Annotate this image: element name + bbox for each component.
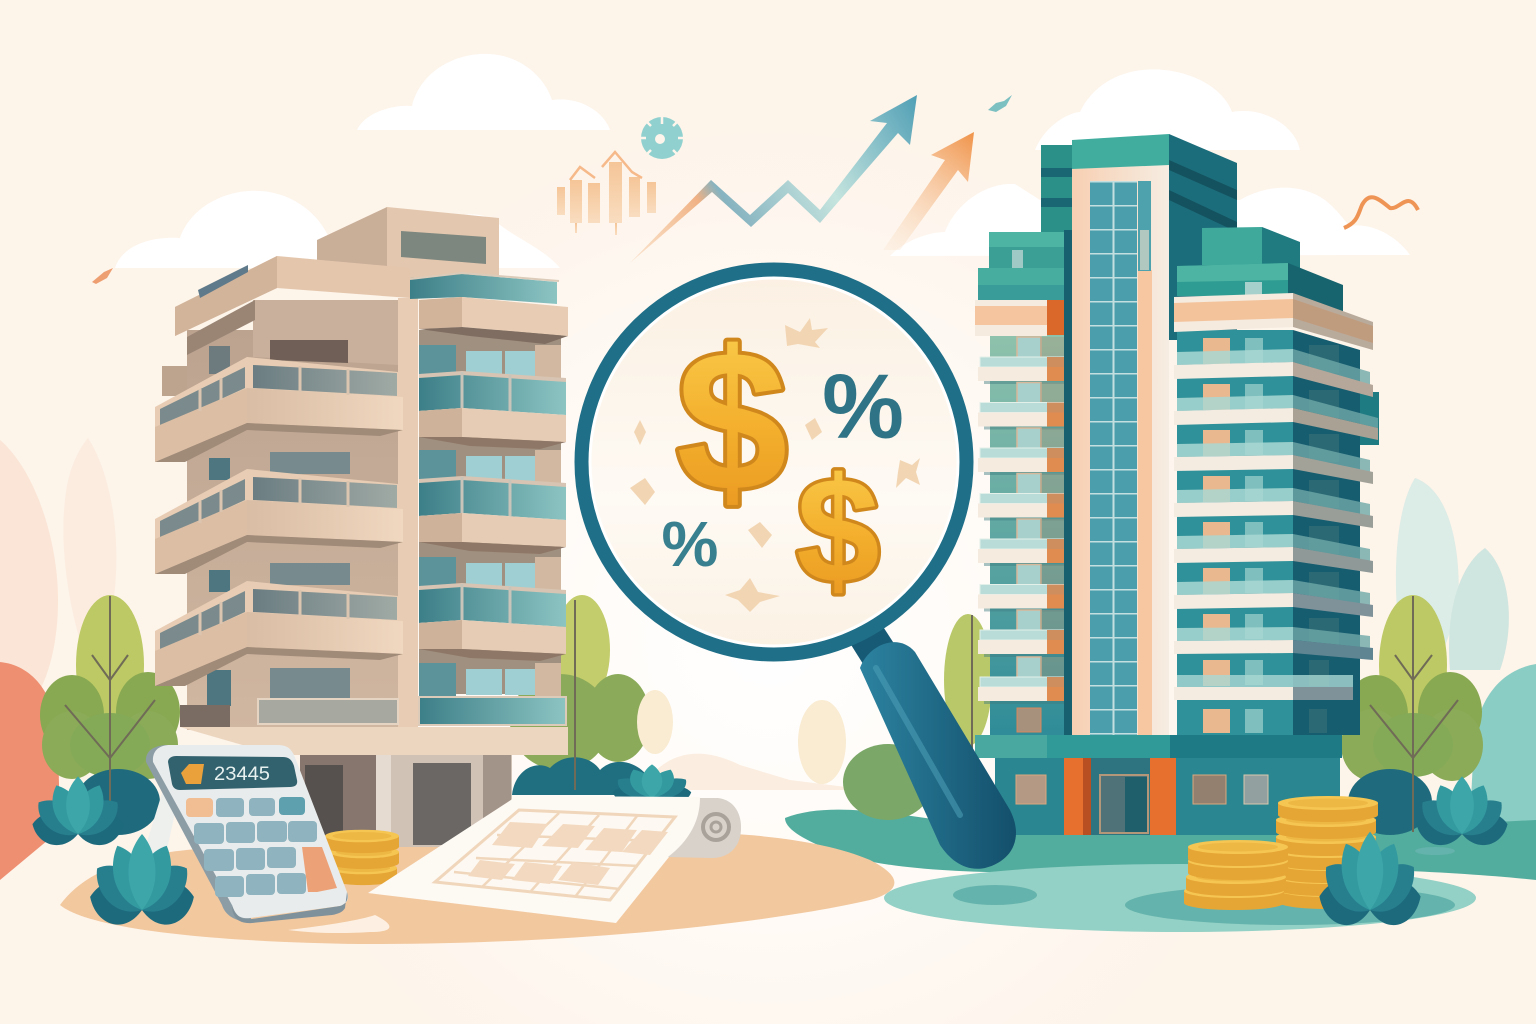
- pale hills in the distance: [640, 754, 870, 790]
- cloud: top centre: [357, 54, 610, 130]
- ground floor: [995, 758, 1340, 835]
- arrow: orange: [883, 132, 974, 250]
- left windows: [207, 452, 350, 706]
- left wing floors: [978, 332, 1064, 732]
- screen: [168, 756, 297, 790]
- lens rim highlight: [590, 278, 958, 646]
- left wing upper storeys: [978, 232, 1064, 300]
- ground: teal right: [785, 810, 1536, 880]
- icon: large dollar sign: $: [676, 310, 788, 533]
- keys: [186, 797, 337, 897]
- icon: large percent sign: %: [822, 356, 904, 458]
- ground floor canopy: [180, 727, 568, 755]
- top right glass balcony: [410, 273, 568, 344]
- central pillar: [398, 298, 418, 730]
- pool shadows: [953, 847, 1455, 925]
- roof slab: [175, 256, 410, 336]
- screen icon: [181, 764, 204, 784]
- hill: teal right: [1470, 664, 1536, 860]
- handle: [848, 622, 1016, 869]
- hill: salmon left: [0, 662, 60, 880]
- coins: front stack: [1184, 840, 1288, 910]
- decoration: right squiggle: [1344, 197, 1418, 228]
- stand: [142, 790, 178, 858]
- icon: small dollar sign: $: [796, 446, 880, 614]
- right side floors: [419, 330, 561, 696]
- dark recess under roof: [253, 300, 398, 365]
- dark column: [1064, 230, 1072, 735]
- right wing floors: [1174, 293, 1378, 733]
- right wing upper storeys: [1177, 227, 1343, 320]
- bottom edge: [232, 892, 348, 923]
- right balconies: [419, 371, 566, 661]
- cloud: behind left building: [115, 191, 560, 268]
- back tower: [1041, 134, 1237, 340]
- canopy: [975, 735, 1342, 758]
- ground: light teal pool: [884, 864, 1476, 932]
- right wing walls: [1177, 330, 1379, 735]
- sand highlight: [288, 915, 389, 933]
- tree: right foreground: [1341, 595, 1483, 835]
- foliage: pale leaves far right: [1396, 478, 1509, 670]
- icon: bar chart: [557, 152, 656, 235]
- bush: calculator foreground: [86, 834, 198, 932]
- bush: left foreground: [28, 776, 128, 851]
- central tower front: [1072, 134, 1169, 735]
- body shadow side: [146, 745, 252, 922]
- cloud: behind right building: [890, 184, 1410, 256]
- icon: gear: [640, 116, 684, 159]
- bush: teal behind scroll: [609, 764, 695, 808]
- tree: behind left building: [510, 595, 673, 795]
- tree: behind magnifier handle: [798, 614, 992, 820]
- building: left tan apartment block: [155, 207, 568, 847]
- coins: left stack behind calculator: [325, 830, 399, 885]
- chart: rising arrows: [557, 95, 974, 263]
- decoration: left bird: [92, 268, 113, 284]
- body: [153, 745, 348, 918]
- lens: [582, 270, 966, 654]
- tree: left foreground: [40, 595, 180, 835]
- balconies: left side: [155, 357, 403, 686]
- building: right teal tower: [975, 134, 1379, 835]
- screen digits: 23445: [214, 764, 270, 785]
- lens scattered marks: [630, 318, 920, 612]
- arrow: teal zigzag: [630, 95, 917, 263]
- ground: sand left: [60, 833, 894, 944]
- magnifying glass: [582, 270, 1016, 869]
- blueprint scroll: [368, 796, 741, 923]
- penthouse: [317, 207, 499, 280]
- orange top band: [1174, 293, 1373, 350]
- cloud: top right: [1035, 69, 1300, 150]
- left wing wall: [990, 335, 1064, 735]
- roll: [668, 798, 741, 858]
- coins: back stack: [1276, 796, 1378, 909]
- bush: coins foreground: [1315, 832, 1425, 933]
- paper: [368, 796, 712, 923]
- foliage: pale leaves far left: [0, 438, 116, 690]
- main wall: [187, 330, 399, 730]
- plan grid: [435, 810, 675, 900]
- icon: small percent sign: %: [662, 508, 718, 580]
- bush: right foreground: [1412, 776, 1512, 851]
- calculator: [142, 745, 348, 923]
- decoration: top right bird: [988, 95, 1012, 112]
- lower right glass: [419, 697, 566, 725]
- lower balcony: [180, 699, 398, 727]
- left wing orange band: [975, 300, 1064, 336]
- ground floor: [300, 755, 512, 847]
